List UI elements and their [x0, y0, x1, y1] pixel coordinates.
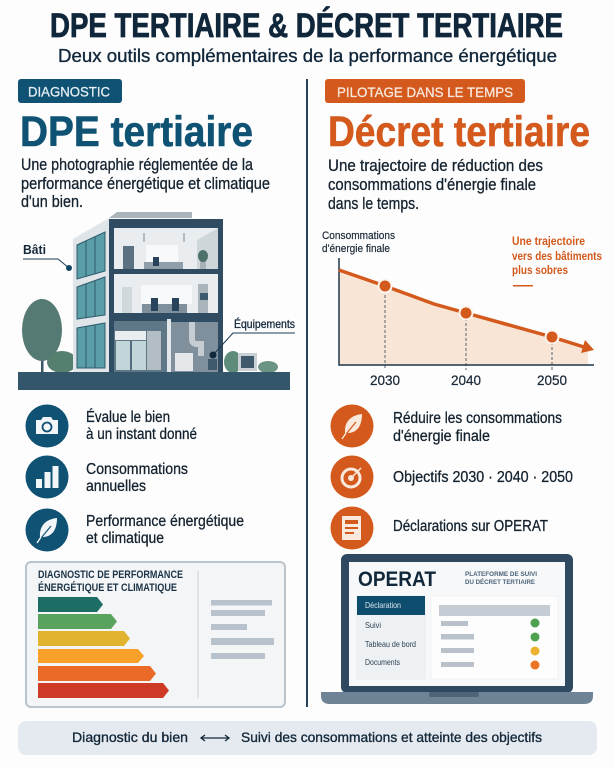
platform caption: PLATEFORME DE SUIVI	[465, 571, 537, 578]
sidebar menu: Déclaration	[365, 600, 401, 610]
arrow: double headed	[201, 735, 229, 741]
description: DPE: Une photographie réglementée de la	[21, 156, 254, 174]
ground floor entrance and equipment	[115, 322, 217, 371]
item: évalue le bien: à un instant donné	[86, 426, 197, 443]
icon: document	[330, 506, 374, 550]
description: DPE	[21, 156, 270, 211]
axis label: d'énergie finale	[322, 243, 390, 255]
laptop base	[321, 692, 593, 704]
left facade	[73, 218, 109, 372]
description: Décret: dans le temps.	[328, 195, 419, 213]
icon: leaf	[26, 508, 68, 552]
milestones	[378, 280, 558, 344]
item: réduire	[330, 404, 562, 448]
year labels: 2040	[451, 373, 481, 388]
icon: tree	[22, 299, 77, 373]
footer right text: Suivi des consommations et atteinte des objectifs	[241, 729, 542, 745]
screen	[349, 562, 565, 686]
list: Décret points	[330, 404, 573, 550]
card heading: ÉNERGÉTIQUE ET CLIMATIQUE	[38, 581, 177, 594]
card heading	[38, 569, 183, 594]
OPERAT logo: OPERAT	[358, 568, 436, 591]
icon: bushes and outdoor unit	[224, 351, 278, 373]
icon: target	[330, 456, 374, 498]
panel: energy label card	[26, 562, 285, 707]
year labels: 2030	[370, 373, 400, 388]
description: Décret: Une trajectoire de réduction des	[328, 157, 543, 175]
middle floor office	[122, 284, 208, 313]
description: DPE: d'un bien.	[21, 193, 83, 211]
panel: Décret tertiaire heading	[325, 79, 590, 213]
platform caption: DU DÉCRET TERTIAIRE	[465, 577, 536, 586]
year labels: 2050	[537, 373, 567, 388]
description: DPE: performance énergétique et climatique	[21, 175, 270, 193]
callout: Bâti: Bâti	[23, 243, 46, 257]
item: déclarations	[330, 506, 548, 550]
sidebar menu: Tableau de bord	[365, 639, 416, 649]
item: évalue le bien: Évalue le bien	[86, 409, 170, 426]
item: performance: et climatique	[86, 530, 164, 547]
year labels	[370, 373, 567, 388]
description: Décret: consommations d'énergie finale	[328, 176, 536, 194]
panel: DPE tertiaire heading	[18, 79, 270, 211]
building frame and floors	[109, 219, 223, 372]
callout: Équipements	[210, 316, 295, 358]
sidebar menu: Suivi	[365, 620, 381, 630]
item: performance: Performance énergétique	[86, 513, 244, 530]
description: Décret	[328, 157, 543, 213]
item: consommations annuelles: Consommations	[86, 461, 188, 478]
axes	[339, 258, 594, 365]
badge: diagnostic	[18, 79, 122, 103]
callout: trajectory	[512, 236, 602, 286]
footer left text: Diagnostic du bien	[72, 729, 188, 745]
ground	[18, 372, 290, 390]
axis label: Consommations	[322, 230, 395, 242]
item: performance	[26, 508, 244, 552]
item: déclarations: Déclarations sur OPERAT	[393, 518, 548, 535]
platform caption	[465, 571, 537, 586]
sidebar menu	[357, 596, 425, 679]
card heading: DIAGNOSTIC DE PERFORMANCE	[38, 569, 183, 581]
item: réduire: d'énergie finale	[393, 428, 490, 445]
subtitle: Deux outils complémentaires de la performance énergétique	[58, 45, 557, 66]
item: objectifs: Objectifs 2030 · 2040 · 2050	[393, 469, 573, 486]
item: objectifs	[330, 456, 573, 498]
arrow head	[581, 340, 594, 353]
badge: diagnostic: DIAGNOSTIC	[28, 84, 110, 100]
chart: trajectory of energy reduction	[322, 230, 602, 388]
callout: trajectory: plus sobres	[512, 265, 568, 277]
dashed year guides	[385, 290, 552, 370]
item: évalue le bien	[26, 404, 197, 448]
item: consommations annuelles: annuelles	[86, 478, 146, 495]
heading: DPE tertiaire: DPE tertiaire	[20, 108, 253, 156]
illustration: building cutaway	[18, 212, 295, 390]
status table	[431, 596, 558, 679]
area under curve	[339, 270, 588, 365]
roof	[109, 212, 192, 218]
item: consommations annuelles	[26, 456, 188, 498]
top floor office	[123, 233, 208, 269]
energy rating arrows	[38, 597, 169, 698]
trajectory line	[339, 270, 584, 347]
callout: trajectory: vers des bâtiments	[512, 251, 602, 263]
callout: trajectory: Une trajectoire	[512, 236, 585, 248]
illustration: OPERAT laptop	[321, 554, 593, 704]
placeholder text lines	[211, 600, 274, 659]
axis label	[322, 230, 395, 255]
icon: camera	[26, 404, 68, 448]
callout: Bâti	[23, 243, 72, 271]
icon: bar chart	[26, 456, 68, 498]
badge: pilotage: PILOTAGE DANS LE TEMPS	[337, 85, 513, 100]
footer bar	[18, 721, 597, 755]
callout: Équipements: Équipements	[234, 316, 295, 331]
sidebar menu: Documents	[365, 657, 400, 667]
badge: pilotage	[325, 79, 525, 103]
laptop notch	[429, 692, 479, 697]
item: réduire: Réduire les consommations	[393, 410, 562, 427]
laptop frame	[341, 554, 573, 693]
list: DPE points	[26, 404, 244, 552]
icon: leaf	[330, 404, 374, 448]
